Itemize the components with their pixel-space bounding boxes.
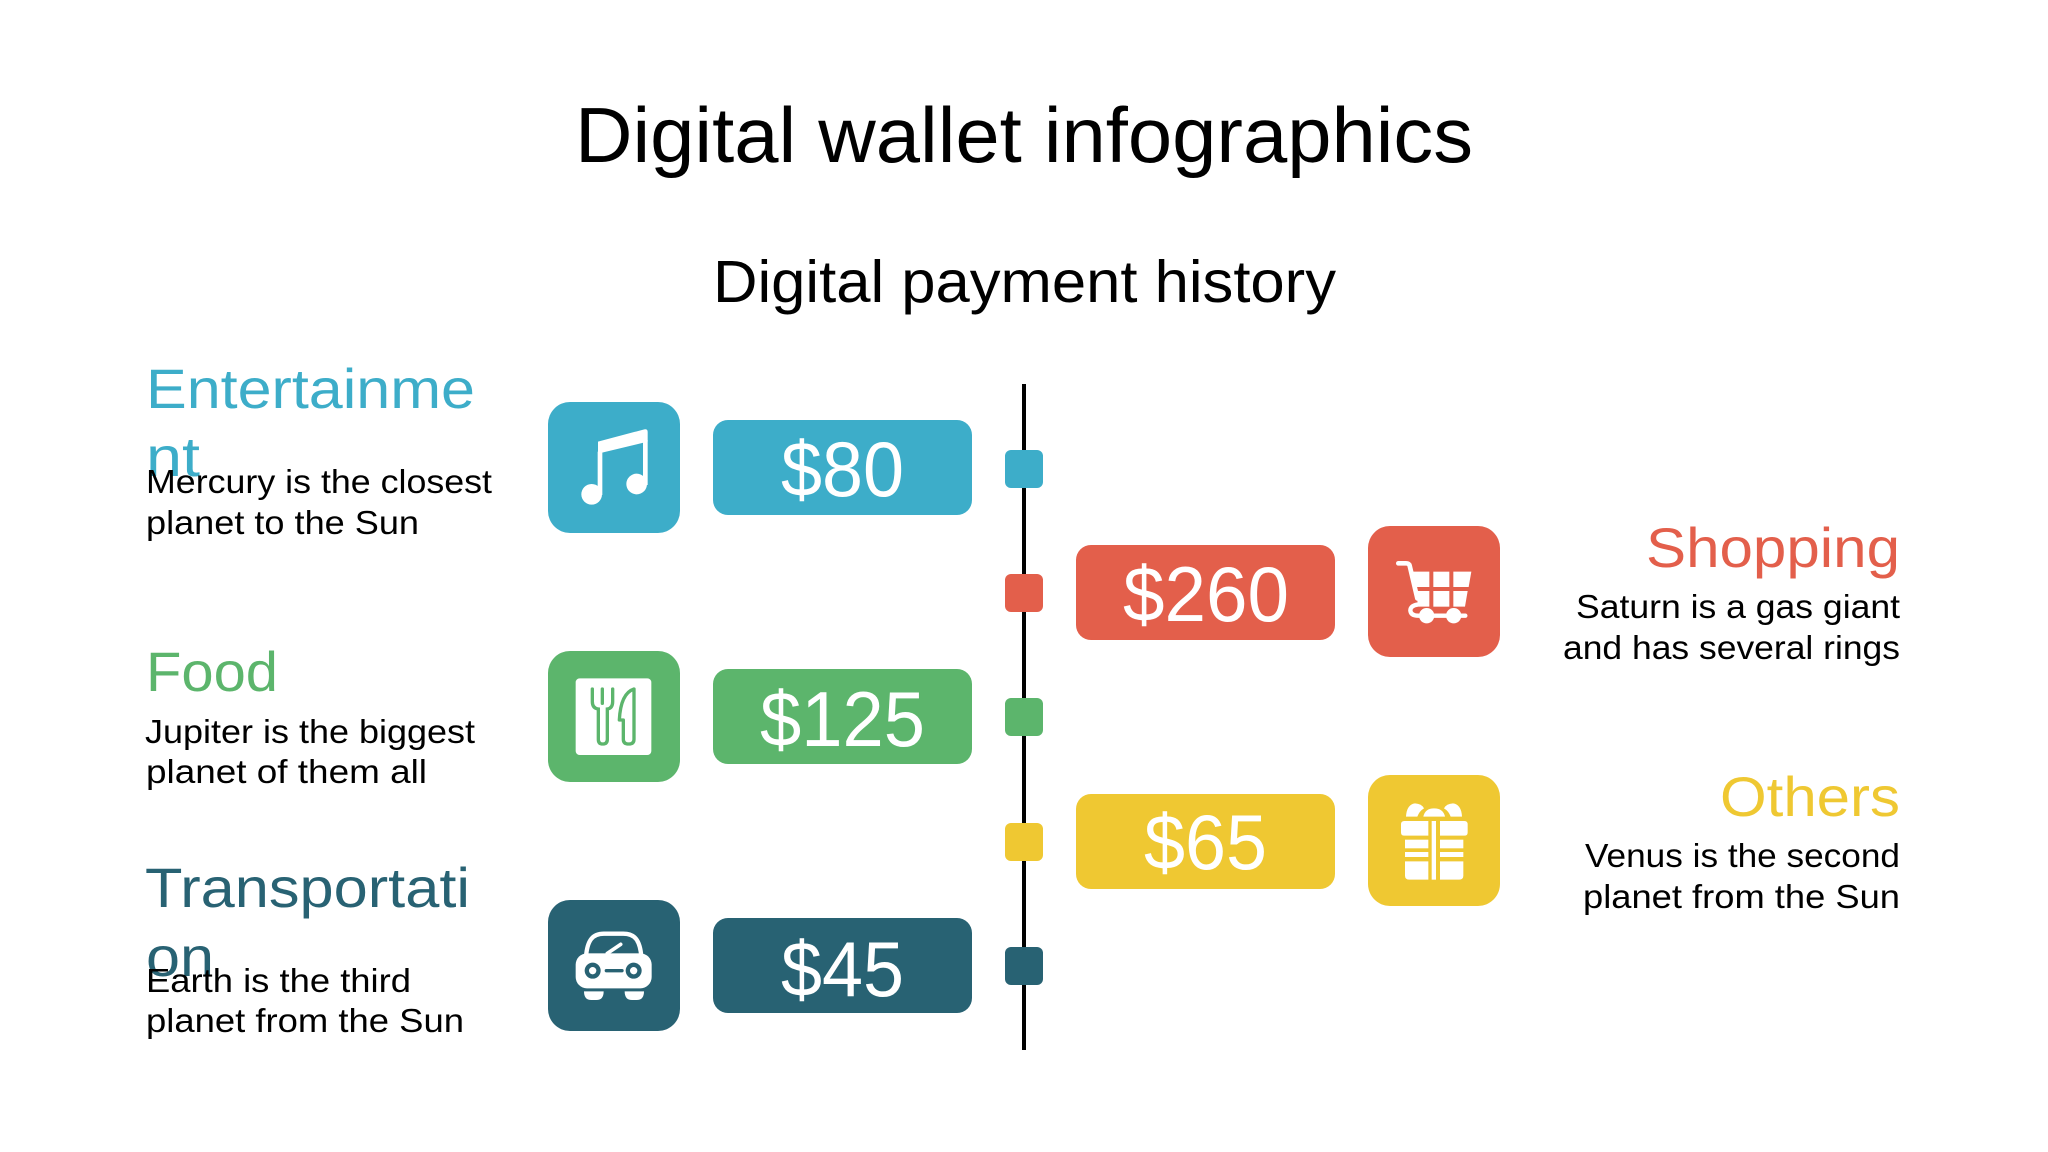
panel: transportation [145, 856, 972, 1039]
amount: $260 [1076, 545, 1335, 640]
heading: food: Food [146, 640, 278, 703]
panel: others [1076, 765, 1900, 915]
icon: gift [1368, 775, 1500, 906]
subtitle: Digital payment history [713, 249, 1337, 315]
icon: music note [548, 402, 680, 533]
amount: $125 [713, 669, 972, 764]
amount: $45: $45 [781, 925, 904, 1013]
icon: fork and knife [548, 651, 680, 782]
amount: $80: $80 [781, 425, 904, 513]
text: venus: planet from the Sun [1583, 878, 1900, 915]
text: mercury: planet to the Sun [146, 504, 419, 541]
text: saturn: Saturn is a gas giant [1576, 588, 1900, 625]
panel: shopping [1076, 516, 1900, 666]
heading: others: Others [1720, 765, 1900, 828]
icon: shopping cart [1368, 526, 1500, 657]
text: earth: Earth is the third [146, 962, 411, 999]
icon: car [548, 900, 680, 1031]
text: mercury: Mercury is the closest [146, 463, 492, 500]
heading: shopping: Shopping [1646, 516, 1900, 579]
text: venus: Venus is the second [1585, 837, 1900, 874]
heading: entertainment: nt [146, 425, 201, 488]
text: saturn: and has several rings [1563, 629, 1900, 666]
timeline axis [1022, 384, 1026, 1050]
panel: entertainment [146, 357, 972, 541]
text: jupiter: planet of them all [146, 753, 427, 790]
amount: $125: $125 [760, 675, 925, 763]
amount: $65: $65 [1144, 798, 1267, 886]
amount: $260: $260 [1123, 550, 1289, 638]
timeline markers [1005, 450, 1043, 985]
text: earth: planet from the Sun [146, 1002, 464, 1039]
amount: $80 [713, 420, 972, 515]
text: jupiter: Jupiter is the biggest [145, 713, 475, 750]
amount: $45 [713, 918, 972, 1013]
title: Digital wallet infographics [575, 91, 1473, 179]
heading: transportation: Transportati [145, 856, 470, 919]
heading: transportation: on [146, 925, 214, 988]
amount: $65 [1076, 794, 1335, 889]
panel: food [145, 640, 972, 790]
heading: entertainment: Entertainme [146, 357, 475, 420]
